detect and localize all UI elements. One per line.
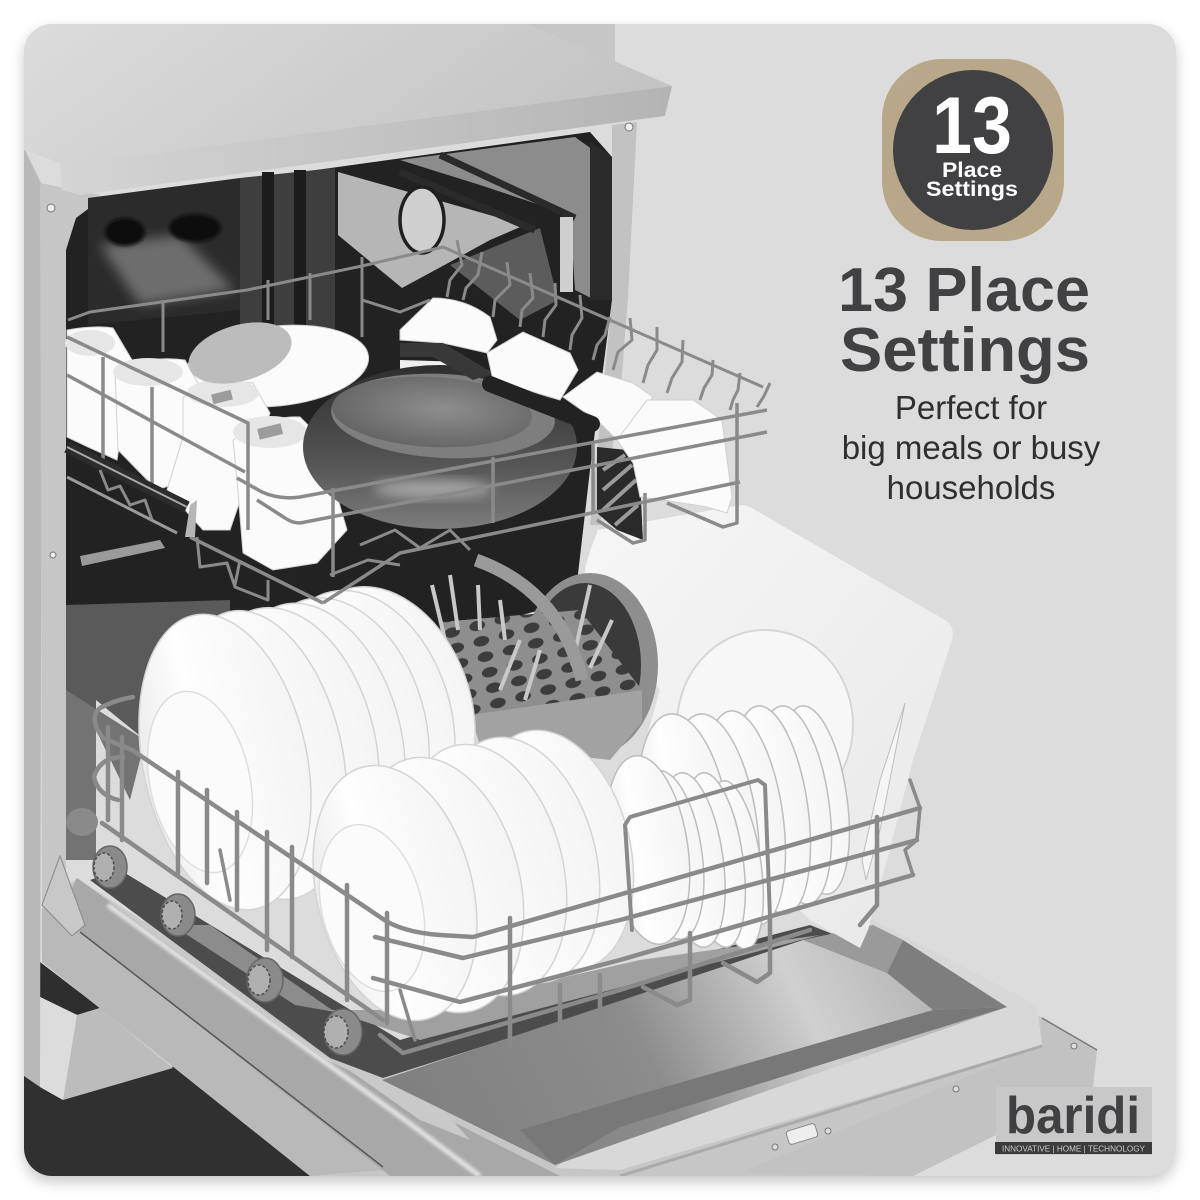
bottom rail <box>380 930 810 1053</box>
basket rear disc <box>534 573 658 747</box>
description: households <box>887 469 1055 506</box>
front rails <box>237 410 767 498</box>
lower tub wall <box>66 600 230 734</box>
dark grid panel <box>597 447 643 540</box>
kick plate <box>40 962 173 1100</box>
cups and bowls <box>67 298 497 570</box>
door silver base <box>42 878 1097 1176</box>
door latch <box>786 1123 818 1145</box>
right verticals <box>643 817 877 1005</box>
cutlery <box>432 575 612 700</box>
left rails <box>67 337 248 530</box>
cup bases <box>65 330 307 448</box>
badge label: Place <box>942 159 1002 182</box>
upper front rail <box>132 750 920 937</box>
right cups <box>487 332 653 440</box>
cup left 3 <box>167 383 270 530</box>
title: 13 Place <box>838 256 1090 325</box>
hinge arm <box>42 856 85 936</box>
back tines <box>447 240 770 410</box>
description: Perfect for <box>895 389 1047 426</box>
lower left rail <box>102 823 383 1020</box>
second front rail <box>375 840 917 958</box>
right cup <box>617 400 732 513</box>
cup left 2 <box>115 359 200 490</box>
left loops <box>95 697 133 750</box>
logo <box>995 1087 1152 1155</box>
slide rail <box>67 447 187 507</box>
basket body <box>442 610 639 714</box>
lower rack wires <box>94 697 920 1053</box>
logo tagline: INNOVATIVE | HOME | TECHNOLOGY <box>1002 1144 1145 1154</box>
back rails <box>68 247 763 387</box>
front verticals <box>333 403 737 577</box>
door right band <box>942 1138 988 1162</box>
badge circle <box>893 70 1053 230</box>
lower front plates <box>312 730 634 1022</box>
door outer face <box>42 908 383 1176</box>
cup left 1 <box>67 327 132 460</box>
description: big meals or busy <box>842 429 1101 466</box>
white bowl behind pan <box>400 360 480 385</box>
counter top <box>24 24 672 163</box>
knife blade <box>862 703 905 880</box>
right reflective wall <box>400 137 600 300</box>
inner tub <box>66 132 612 660</box>
large bowl left <box>188 324 370 408</box>
right end wires <box>905 780 920 875</box>
logo tagline bar <box>995 1142 1152 1154</box>
logo wordmark: baridi <box>1006 1087 1140 1145</box>
door trim bands <box>60 878 560 1176</box>
frying pan <box>303 365 577 529</box>
door inner tray <box>382 925 1007 1165</box>
lower back plates <box>138 586 476 910</box>
basket handle <box>476 560 582 680</box>
floor shadow <box>24 1066 315 1176</box>
open door <box>42 870 1097 1176</box>
dishwasher body <box>24 24 672 1087</box>
door inner track <box>90 870 835 1078</box>
door rim <box>555 920 1042 1170</box>
cutlery basket <box>432 560 658 760</box>
counter edge <box>60 86 672 195</box>
logo backdrop <box>996 1087 1152 1155</box>
front frame <box>40 183 100 905</box>
badge <box>882 59 1064 241</box>
rack wheels <box>93 846 362 1055</box>
pan handle <box>490 384 592 424</box>
side panel <box>24 148 42 1087</box>
badge number: 13 <box>932 81 1012 171</box>
lower right small plates <box>610 705 850 949</box>
badge label: Settings <box>926 178 1018 201</box>
upper rack contents <box>65 298 732 570</box>
upper rack wires <box>67 240 770 603</box>
third front rail <box>373 875 913 1002</box>
cutting board <box>585 505 953 948</box>
left verticals <box>108 727 510 1047</box>
left reflective wall <box>88 178 240 325</box>
title: Settings <box>840 316 1090 385</box>
spatula <box>400 343 493 380</box>
plate holder <box>625 780 770 930</box>
top bowl <box>400 298 497 353</box>
badge tile <box>882 59 1064 241</box>
cup left 4 <box>233 417 347 570</box>
screws <box>47 204 55 212</box>
large plate on cutting board <box>676 629 854 771</box>
